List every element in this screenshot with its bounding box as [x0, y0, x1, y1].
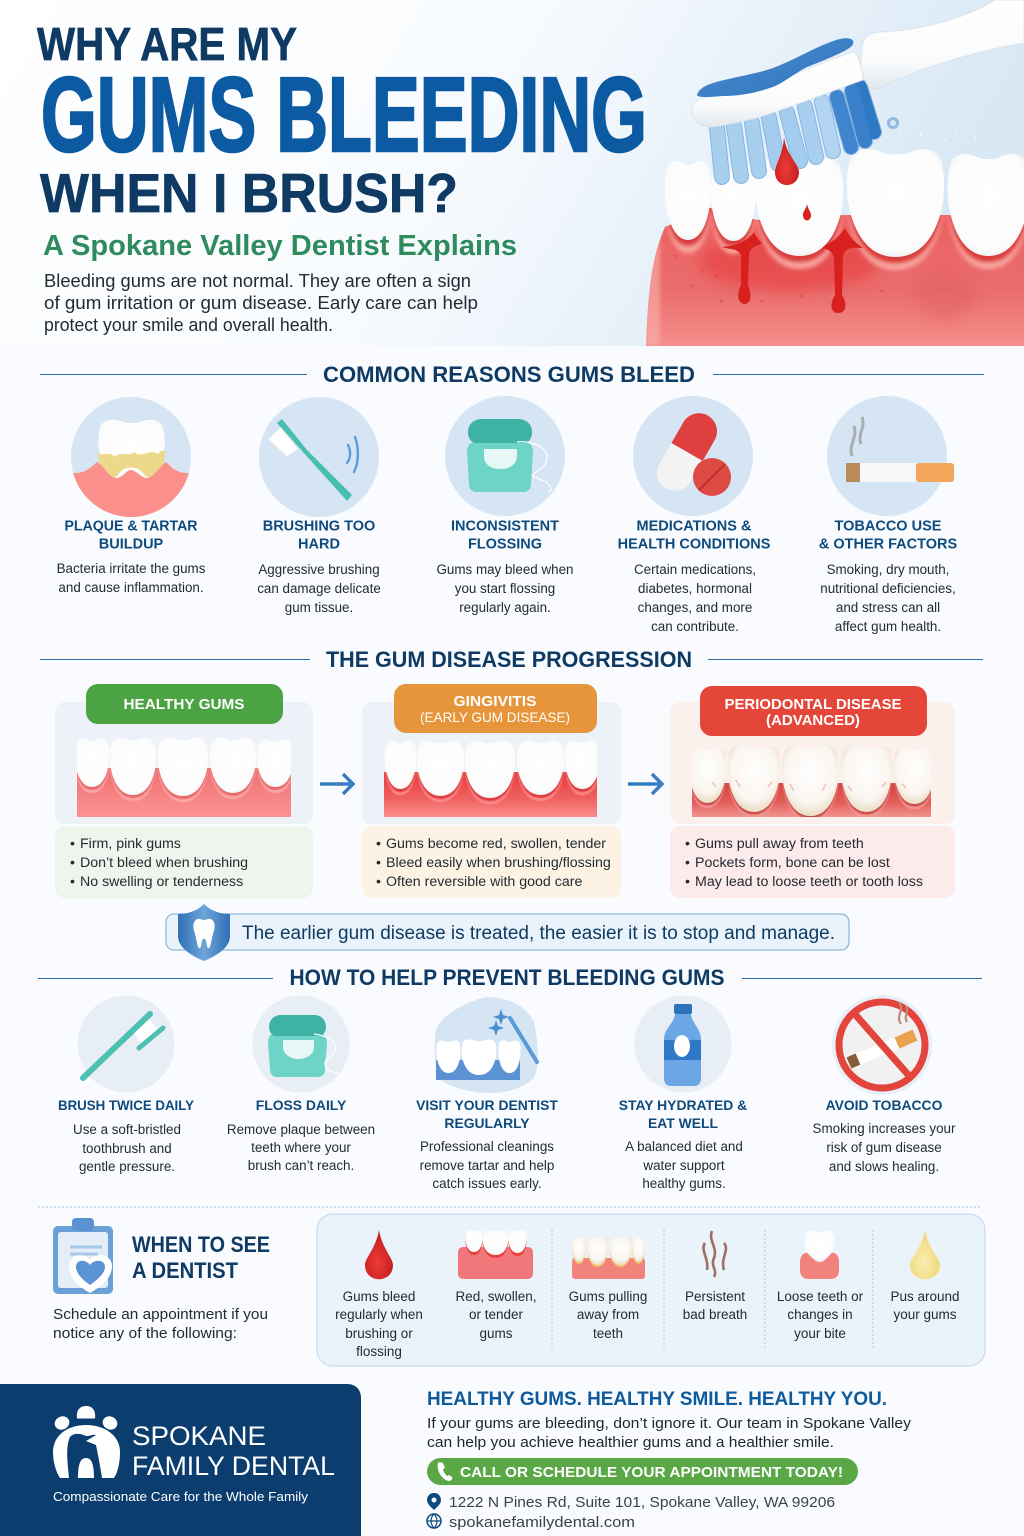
call to action button: CALL OR SCHEDULE YOUR APPOINTMENT TODAY! [460, 1464, 843, 1481]
icon: toothbrush [259, 397, 379, 517]
text [427, 1415, 912, 1451]
description: Use a soft-bristled [73, 1122, 181, 1137]
sign: red gums [455, 1230, 537, 1341]
title: GUMS BLEEDING [41, 56, 647, 174]
symptom list: • [70, 836, 75, 852]
description: regularly again. [459, 600, 551, 615]
reason: brushing too hard: HARD [298, 536, 340, 552]
sign: red gums: gums [479, 1326, 513, 1341]
section heading: common reasons: COMMON REASONS GUMS BLEED [323, 362, 695, 387]
heading: WHEN TO SEE [132, 1232, 270, 1257]
sign: red gums: or tender [469, 1307, 524, 1322]
description: can damage delicate [257, 581, 381, 596]
label: MEDICATIONS & [637, 518, 752, 534]
symptom list: • [376, 836, 381, 852]
text: can help you achieve healthier gums and a healthier smile. [427, 1434, 834, 1451]
tip: visit dentist [416, 997, 558, 1191]
icon: cigarette [827, 396, 954, 516]
blood drop [775, 137, 799, 185]
description: and cause inflammation. [58, 580, 204, 595]
address: 1222 N Pines Rd, Suite 101, Spokane Valley, WA 99206 [449, 1494, 835, 1511]
tip: floss daily [227, 996, 375, 1173]
description: Remove plaque between [227, 1122, 375, 1137]
brand name [132, 1421, 335, 1481]
reason: tobacco [819, 396, 957, 634]
brand name: SPOKANE [132, 1421, 266, 1451]
sign: bad breath [683, 1231, 747, 1322]
symptom list [362, 826, 621, 898]
description: Aggressive brushing [258, 562, 380, 577]
logo [52, 1406, 120, 1478]
pill heading [86, 684, 283, 724]
description: A balanced diet and [625, 1139, 743, 1154]
symptom list: • [685, 836, 690, 852]
reason: plaque and tartar [57, 397, 206, 595]
description: can contribute. [651, 619, 739, 634]
text: notice any of the following: [53, 1325, 237, 1342]
sign: bad breath: Persistent [685, 1289, 745, 1304]
icon: toothbrush [78, 996, 174, 1092]
icon: water bottle [634, 996, 732, 1092]
arrow [628, 774, 662, 794]
description [820, 562, 956, 634]
sign: loose teeth: your bite [794, 1326, 846, 1341]
pill heading: (ADVANCED) [766, 712, 860, 729]
description: nutritional deficiencies, [820, 581, 956, 596]
description [437, 562, 573, 615]
sign: loose teeth: Loose teeth or [777, 1289, 864, 1304]
icon: shield with tooth [178, 904, 230, 961]
panel: warning signs [317, 1214, 985, 1366]
reason: inconsistent flossing: FLOSSING [468, 536, 542, 552]
tip: brush twice daily [58, 996, 195, 1174]
hero banner [0, 0, 1024, 346]
tip: hydrate: EAT WELL [648, 1115, 718, 1131]
description: you start flossing [455, 581, 555, 596]
icon: clean teeth with sparkles [435, 997, 538, 1093]
icon: floss container [252, 996, 350, 1092]
pill heading: PERIODONTAL DISEASE [724, 696, 902, 713]
sign: bleeding: brushing or [345, 1326, 413, 1341]
pill heading [700, 686, 927, 736]
description: gentle pressure. [79, 1159, 175, 1174]
title: WHY ARE MY [37, 18, 297, 70]
hero illustration: gums, teeth and toothbrush [646, 0, 1024, 346]
call to action button [427, 1458, 858, 1485]
description [57, 561, 206, 595]
callout: earlier treatment [166, 904, 849, 961]
reason: plaque and tartar: BUILDUP [99, 536, 164, 552]
callout: earlier treatment: The earlier gum disease is treated, the easier it is to stop and manage. [242, 923, 835, 944]
description [257, 562, 381, 615]
symptom list: May lead to loose teeth or tooth loss [695, 874, 923, 890]
sign: pus [890, 1230, 960, 1322]
symptom list: Pockets form, bone can be lost [695, 855, 890, 871]
description: healthy gums. [642, 1176, 726, 1191]
subtitle: A Spokane Valley Dentist Explains [43, 230, 517, 262]
sign: bleeding: Gums bleed [343, 1289, 415, 1304]
reason: medications [618, 396, 771, 634]
panel: gingivitis [362, 684, 621, 898]
description: and slows healing. [829, 1159, 939, 1174]
sign: receding gums: teeth [593, 1326, 623, 1341]
reason: medications: HEALTH CONDITIONS [618, 536, 771, 552]
teeth illustration [384, 741, 600, 817]
sign: red gums: Red, swollen, [455, 1289, 537, 1304]
closing message [427, 1389, 912, 1531]
description [420, 1139, 554, 1191]
footer brand panel [0, 1384, 361, 1536]
description: Bacteria irritate the gums [57, 561, 206, 576]
reason: inconsistent flossing [437, 396, 573, 615]
symptom list [670, 826, 955, 898]
pill heading: (EARLY GUM DISEASE) [420, 709, 570, 725]
icon: tooth with plaque [71, 397, 191, 517]
heading: HEALTHY GUMS. HEALTHY SMILE. HEALTHY YOU. [427, 1389, 887, 1410]
text: Schedule an appointment if you [53, 1306, 268, 1323]
description: changes, and more [638, 600, 752, 615]
label: BRUSHING TOO [263, 518, 375, 534]
description: Certain medications, [634, 562, 756, 577]
when to see a dentist [53, 1218, 270, 1342]
sign: receding gums: Gums pulling [569, 1289, 647, 1304]
symptom list: • [685, 855, 690, 871]
label: VISIT YOUR DENTIST [416, 1097, 558, 1113]
title [37, 18, 647, 224]
symptom list: • [376, 855, 381, 871]
sign: pus: Pus around [890, 1289, 960, 1304]
tagline: Compassionate Care for the Whole Family [53, 1489, 309, 1504]
arrow [320, 774, 353, 794]
symptom list: Bleed easily when brushing/flossing [386, 855, 611, 871]
sign: bad breath: bad breath [683, 1307, 747, 1322]
label: FLOSS DAILY [256, 1097, 347, 1113]
description: catch issues early. [432, 1176, 542, 1191]
description: risk of gum disease [826, 1140, 942, 1155]
icon: pills [633, 396, 753, 516]
teeth illustration [689, 746, 935, 821]
reason: tobacco: & OTHER FACTORS [819, 536, 957, 552]
icon: no smoking [832, 995, 932, 1095]
symptom list: Firm, pink gums [80, 836, 181, 852]
label: STAY HYDRATED & [619, 1097, 747, 1113]
brand name: FAMILY DENTAL [132, 1451, 335, 1481]
symptom list: Often reversible with good care [386, 874, 582, 890]
sign: bleeding: regularly when [335, 1307, 423, 1322]
title: WHEN I BRUSH? [40, 162, 458, 224]
description [625, 1139, 743, 1191]
symptom list: • [685, 874, 690, 890]
icon: clipboard with heart [53, 1218, 113, 1294]
intro paragraph [44, 271, 478, 335]
sign: pus: your gums [893, 1307, 957, 1322]
symptom list [55, 826, 313, 898]
label: BRUSH TWICE DAILY [58, 1097, 195, 1113]
pill heading: GINGIVITIS [454, 693, 536, 710]
label: INCONSISTENT [451, 518, 559, 534]
pill heading: HEALTHY GUMS [124, 696, 244, 713]
description: teeth where your [251, 1140, 351, 1155]
sign: bleeding [335, 1230, 423, 1359]
label: AVOID TOBACCO [826, 1097, 943, 1113]
intro paragraph: Bleeding gums are not normal. They are often a sign [44, 271, 471, 291]
symptom list: Don’t bleed when brushing [80, 855, 248, 871]
description: gum tissue. [285, 600, 353, 615]
label: PLAQUE & TARTAR [64, 518, 198, 534]
website: spokanefamilydental.com [449, 1514, 635, 1531]
reason: brushing too hard [257, 397, 381, 615]
description: diabetes, hormonal [638, 581, 752, 596]
symptom list: • [376, 874, 381, 890]
description: water support [642, 1158, 725, 1173]
description: brush can’t reach. [248, 1158, 354, 1173]
sign: loose teeth: changes in [787, 1307, 853, 1322]
sign: receding gums: away from [577, 1307, 639, 1322]
handle and head [861, 0, 1024, 89]
heading: A DENTIST [132, 1258, 239, 1283]
section heading: progression: THE GUM DISEASE PROGRESSION [326, 647, 692, 672]
panel: periodontal disease [670, 686, 955, 898]
sign: bleeding: flossing [356, 1344, 402, 1359]
description: Smoking increases your [813, 1121, 956, 1136]
toothbrush bristles [717, 87, 874, 177]
symptom list: Gums become red, swollen, tender [386, 836, 606, 852]
description: Gums may bleed when [437, 562, 573, 577]
description: toothbrush and [82, 1141, 172, 1156]
tip: avoid tobacco [813, 995, 956, 1174]
tip: visit dentist: REGULARLY [444, 1115, 530, 1131]
text: If your gums are bleeding, don’t ignore it. Our team in Spokane Valley [427, 1415, 912, 1432]
intro paragraph: protect your smile and overall health. [44, 315, 333, 335]
intro paragraph: of gum irritation or gum disease. Early care can help [44, 293, 478, 313]
heading [132, 1232, 270, 1283]
description: remove tartar and help [420, 1158, 554, 1173]
icon: floss container [445, 396, 565, 516]
sign: receding gums [569, 1237, 647, 1341]
symptom list: Gums pull away from teeth [695, 836, 864, 852]
section heading: prevention: HOW TO HELP PREVENT BLEEDING GUMS [290, 965, 724, 990]
blood streaks [722, 232, 762, 304]
description [227, 1122, 375, 1173]
description: and stress can all [836, 600, 940, 615]
symptom list: • [70, 855, 75, 871]
description: Professional cleanings [420, 1139, 554, 1154]
pill heading [394, 684, 597, 733]
text [53, 1306, 268, 1342]
tip: hydrate [619, 996, 747, 1191]
description: affect gum health. [835, 619, 941, 634]
label: TOBACCO USE [835, 518, 942, 534]
teeth illustration [75, 738, 294, 817]
description: Smoking, dry mouth, [827, 562, 949, 577]
description [813, 1121, 956, 1174]
sign: loose teeth [777, 1230, 864, 1341]
symptom list: • [70, 874, 75, 890]
symptom list: No swelling or tenderness [80, 874, 243, 890]
description [634, 562, 756, 634]
description [73, 1122, 181, 1174]
panel: healthy gums [55, 684, 313, 898]
